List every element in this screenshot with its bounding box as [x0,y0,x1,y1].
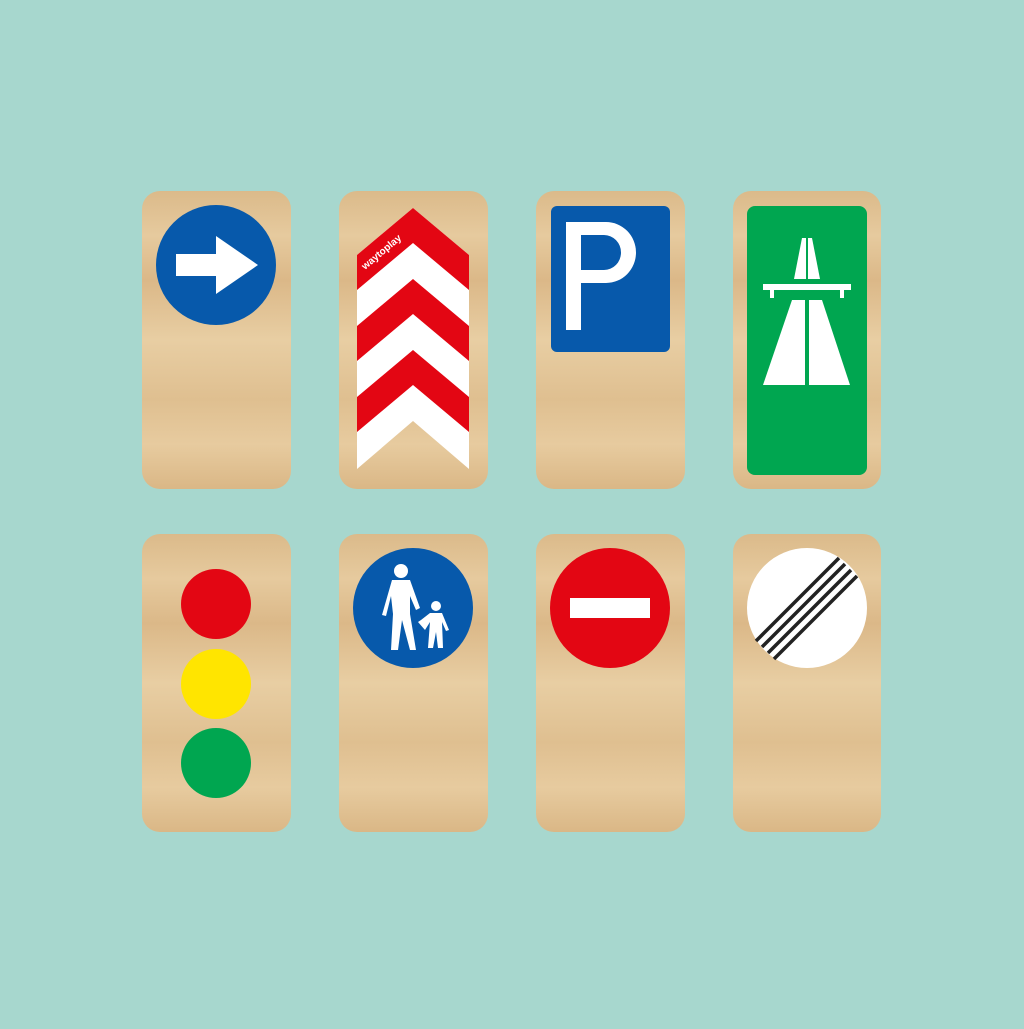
icon: red white chevrons [357,208,469,469]
icon: green light [181,728,251,798]
icon: red light [181,569,251,639]
tile: keep right sign [142,191,291,489]
tile: end of motorway [733,534,881,832]
tile: parking sign [536,191,685,489]
icon: pedestrian circle [353,548,473,668]
tile: no entry sign [536,534,685,832]
icon: green motorway [747,206,867,475]
tile: motorway sign [733,191,881,489]
icon: blue P [551,206,670,352]
icon: end restriction [747,548,867,668]
tile: traffic light [142,534,291,832]
text: brand: waytoplay [359,233,404,273]
icon: no entry [550,548,670,668]
tile: pedestrian sign [339,534,488,832]
icon: yellow light [181,649,251,719]
tile: chevron marker [339,191,488,489]
icon: blue circle with right arrow [156,205,276,325]
